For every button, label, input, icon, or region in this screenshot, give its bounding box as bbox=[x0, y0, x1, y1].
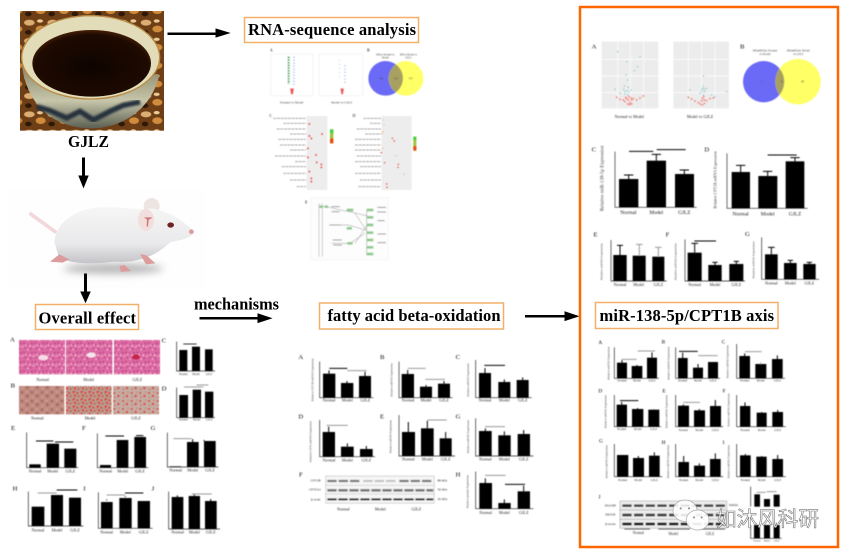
bar chart C: C bbox=[722, 339, 726, 345]
micrographs: liver histology H&E: GJLZ bbox=[132, 377, 143, 382]
photo: white mouse bbox=[7, 188, 205, 288]
bar chart I: Normal bbox=[741, 478, 750, 482]
heading: miR-138-5p/CPT1B axis bbox=[596, 302, 778, 328]
arrow: mechanisms bbox=[200, 314, 271, 322]
bar chart A bbox=[598, 340, 659, 383]
bar chart I bbox=[83, 486, 153, 535]
venn diagram B: 5 bbox=[761, 80, 763, 84]
bar chart F: Model bbox=[117, 468, 129, 473]
bar chart D bbox=[598, 389, 661, 431]
venn diagram B: DEmiRNAs Model bbox=[787, 49, 810, 53]
bar chart H: GJLZ bbox=[519, 510, 529, 515]
western blot F: CPT1B bbox=[311, 479, 321, 483]
bar chart D: Model bbox=[193, 418, 201, 422]
bar chart E: E bbox=[662, 389, 666, 395]
bar chart G bbox=[745, 231, 819, 285]
bar chart C: Model bbox=[757, 379, 765, 383]
micrographs: liver Oil Red O staining: Normal bbox=[31, 415, 45, 420]
bar chart I: GJLZ bbox=[139, 530, 149, 535]
bar chart C: Model bbox=[499, 398, 511, 403]
small bar charts beside blot J: Normal bbox=[753, 540, 761, 543]
bar chart C bbox=[456, 354, 532, 403]
arrow: fatty acid oxidation to miR axis bbox=[526, 312, 578, 320]
bar chart A: Relative CPT1B mRNA Expression bbox=[311, 358, 315, 401]
micrographs: liver Oil Red O staining: GJLZ bbox=[131, 415, 141, 420]
bar chart D: Normal bbox=[617, 427, 626, 431]
panel: miR-138-5p/CPT1B axis frame bbox=[580, 7, 838, 547]
micrographs: liver Oil Red O staining: Model bbox=[85, 415, 96, 420]
bar chart E: Normal bbox=[402, 457, 416, 462]
bar chart A bbox=[298, 354, 373, 403]
watermark: WeChat icon bbox=[673, 500, 709, 530]
bar chart G: Relative mRNA Expression bbox=[605, 445, 609, 478]
venn diagram: DEGs Model vs bbox=[400, 54, 417, 57]
bar chart B: Normal bbox=[402, 398, 415, 403]
bar chart H: Relative protein Expression bbox=[465, 475, 469, 508]
venn diagram B: 6 bbox=[781, 80, 783, 84]
bar chart G bbox=[151, 425, 218, 473]
bar chart B: Model bbox=[421, 398, 432, 403]
venn diagram: 757 bbox=[408, 76, 413, 80]
KEGG bubble chart D: D bbox=[353, 113, 356, 118]
bar chart D: GJLZ bbox=[206, 418, 213, 422]
heading: fatty acid beta-oxidation: fatty acid beta-oxidation bbox=[328, 306, 500, 325]
bar chart E: Model bbox=[633, 282, 645, 287]
bar chart D bbox=[162, 385, 215, 422]
bar chart G: Relative mRNA Expression bbox=[751, 241, 755, 278]
bar chart G: Normal bbox=[169, 468, 183, 473]
bar chart E: GJLZ bbox=[712, 428, 719, 432]
bar chart H: GJLZ bbox=[712, 478, 719, 482]
volcano plot Normal vs Model: A bbox=[592, 43, 597, 50]
bar chart C: Relative mRNA Expression bbox=[725, 345, 729, 378]
venn diagram: 764 bbox=[379, 76, 384, 80]
bar chart E bbox=[380, 413, 455, 462]
KEGG bubble chart D bbox=[353, 113, 416, 190]
arrow: mouse to overall effect bbox=[81, 274, 90, 302]
bar chart H: Normal bbox=[32, 528, 45, 533]
bar chart C: Normal bbox=[179, 372, 188, 376]
bar chart C: Model bbox=[649, 210, 664, 216]
bar chart B: Model bbox=[694, 379, 702, 383]
bar chart E: Relative mRNA Expression bbox=[665, 395, 669, 428]
panel: miRNA sequencing and qPCR figures bbox=[592, 42, 821, 287]
bar chart E bbox=[11, 425, 78, 473]
western blot F: 50 kDa bbox=[437, 488, 448, 492]
bar chart E: Relative mRNA Expression bbox=[389, 420, 393, 453]
bar chart E bbox=[593, 232, 667, 287]
bar chart G: Model bbox=[785, 280, 797, 285]
venn diagram: Model bbox=[382, 56, 389, 59]
venn diagram bbox=[367, 48, 423, 96]
bar chart I: Relative mRNA Expression bbox=[727, 445, 731, 478]
arrow: tea to RNA sequencing bbox=[168, 29, 229, 37]
bar chart F bbox=[723, 389, 786, 432]
bar chart H: Normal bbox=[679, 478, 688, 482]
bar chart D bbox=[704, 147, 808, 217]
bar chart D: D bbox=[162, 386, 167, 393]
bar chart H: H bbox=[456, 472, 461, 479]
heading: fatty acid beta-oxidation bbox=[320, 303, 504, 329]
photo: bowl of GJLZ tea bbox=[20, 11, 164, 131]
venn diagram B: B bbox=[740, 43, 745, 50]
bar chart J: Model bbox=[189, 530, 201, 535]
KEGG bubble chart C: C bbox=[269, 113, 272, 118]
pathway diagram: E bbox=[305, 199, 308, 204]
bar chart J: J bbox=[152, 486, 155, 493]
bar chart C: C bbox=[592, 147, 597, 154]
bar chart E: E bbox=[593, 232, 597, 239]
bar chart C: GJLZ bbox=[774, 379, 781, 383]
bar chart D: Normal bbox=[179, 418, 188, 422]
panel: overall effect figures bbox=[10, 337, 220, 535]
bar chart G: Relative mRNA Expression bbox=[466, 420, 470, 453]
bar chart H: Relative mRNA Expression bbox=[666, 445, 670, 478]
bar chart E: E bbox=[380, 413, 384, 420]
bar chart D: Model bbox=[761, 211, 775, 217]
bar chart I bbox=[723, 440, 786, 482]
bar chart E: Normal bbox=[29, 468, 42, 473]
bar chart H bbox=[662, 440, 723, 482]
western blot F: 42 kDa bbox=[437, 497, 448, 501]
pathway diagram bbox=[305, 198, 388, 260]
bar chart G: G bbox=[599, 439, 603, 445]
bar chart C bbox=[592, 145, 697, 216]
bar chart A: A bbox=[598, 340, 602, 346]
bar chart C: GJLZ bbox=[518, 398, 528, 403]
bar chart H: H bbox=[13, 486, 18, 493]
bar chart H: Model bbox=[499, 510, 511, 515]
bar chart F: GJLZ bbox=[774, 428, 781, 432]
bar chart H: H bbox=[662, 440, 666, 446]
heading: Overall effect: Overall effect bbox=[38, 308, 136, 328]
bar chart A: A bbox=[298, 354, 303, 361]
bar chart G bbox=[456, 413, 533, 462]
heading: RNA-sequence analysis: RNA-sequence analysis bbox=[248, 20, 417, 39]
bar chart H: Model bbox=[52, 528, 63, 533]
western blot J: GJLZ bbox=[706, 532, 715, 536]
bar chart C: Normal bbox=[620, 210, 637, 216]
panel: RNA-sequence figures bbox=[269, 48, 423, 260]
bar chart C: GJLZ bbox=[678, 210, 691, 216]
bar chart A: Normal bbox=[617, 379, 627, 383]
bar chart G bbox=[599, 439, 662, 482]
bar chart G: G bbox=[745, 231, 750, 238]
western blot F: 88 kDa bbox=[437, 479, 448, 483]
bar chart F: F bbox=[82, 425, 86, 432]
bar chart G: GJLZ bbox=[205, 468, 215, 473]
bar chart D: Relative CPT1B mRNA Expression bbox=[713, 151, 718, 209]
bar chart G: GJLZ bbox=[804, 280, 815, 285]
bar chart A: Relative mRNA Expression bbox=[606, 346, 610, 380]
bar chart D: GJLZ bbox=[650, 427, 657, 431]
bar chart B: Normal bbox=[678, 379, 687, 383]
bar chart D: D bbox=[598, 389, 602, 395]
western blot J: Normal bbox=[633, 531, 644, 535]
bar chart H: Normal bbox=[479, 510, 493, 515]
bar chart C: Relative miR-138-5p Expression bbox=[600, 145, 605, 211]
bar chart H bbox=[456, 472, 533, 515]
bar chart E: Model bbox=[422, 457, 434, 462]
bar chart H bbox=[13, 486, 83, 533]
western blot F: F bbox=[299, 472, 303, 479]
small bar charts beside blot J bbox=[751, 487, 782, 543]
bar chart G: Model bbox=[634, 478, 642, 482]
bar chart B bbox=[380, 354, 453, 403]
small bar charts beside blot J: GJLZ bbox=[774, 540, 780, 543]
bar chart F: GJLZ bbox=[135, 468, 145, 473]
bar chart C bbox=[722, 339, 785, 383]
volcano plots bbox=[270, 49, 363, 104]
bar chart B: GJLZ bbox=[439, 398, 449, 403]
venn diagram B: vs GJLZ bbox=[793, 52, 804, 56]
bar chart B: Relative mRNA Expression bbox=[667, 346, 671, 380]
bar chart D: Normal bbox=[323, 457, 336, 462]
bar chart C: Model bbox=[192, 372, 200, 376]
bar chart B: B bbox=[662, 339, 666, 345]
bar chart A: Model bbox=[633, 379, 641, 383]
KEGG bubble chart C bbox=[269, 113, 333, 190]
bar chart E: GJLZ bbox=[441, 457, 451, 462]
bar chart B: Relative mRNA Expression bbox=[389, 363, 393, 397]
bar chart H: Model bbox=[695, 478, 703, 482]
bar chart F: Relative mRNA Expression bbox=[674, 243, 678, 280]
venn diagram: B bbox=[367, 48, 370, 53]
bar chart A: Model bbox=[342, 398, 354, 403]
venn diagram B: 68 bbox=[801, 80, 805, 84]
bar chart B: GJLZ bbox=[710, 379, 717, 383]
bar chart D: Relative CPT2 mRNA Expression bbox=[309, 421, 313, 462]
bar chart C: C bbox=[162, 337, 167, 344]
western blot J: Model bbox=[669, 532, 678, 536]
bar chart F: Normal bbox=[688, 282, 702, 287]
venn diagram: 357 bbox=[394, 76, 399, 80]
western blot J: J bbox=[598, 494, 600, 500]
bar chart J bbox=[152, 486, 220, 535]
bar chart D: Model bbox=[342, 457, 354, 462]
western blot J bbox=[598, 494, 739, 536]
volcano plot Model vs GJLZ bbox=[673, 42, 729, 119]
micrographs: liver Oil Red O staining: B bbox=[11, 383, 16, 390]
bar chart E: Relative mRNA Expression bbox=[600, 243, 604, 280]
bar chart A: GJLZ bbox=[360, 398, 371, 403]
bar chart G: G bbox=[456, 413, 461, 420]
micrographs: liver histology H&E: Model bbox=[83, 377, 95, 382]
micrographs: liver histology H&E: A bbox=[10, 337, 15, 344]
bar chart I: I bbox=[723, 440, 725, 446]
western blot J: DICER bbox=[605, 513, 616, 517]
bar chart C bbox=[162, 337, 215, 376]
western blot F: CPT2A1 bbox=[309, 488, 321, 492]
western blot F: Normal bbox=[337, 507, 351, 512]
volcano plots: Normal vs Model bbox=[280, 100, 303, 104]
bar chart C: Relative mRNA Expression bbox=[466, 363, 470, 397]
bar chart G: Normal bbox=[618, 478, 627, 482]
bar chart G: G bbox=[151, 425, 156, 432]
bar chart E: Normal bbox=[614, 282, 627, 287]
venn diagram B: vs Model bbox=[759, 52, 771, 56]
western blot F: Model bbox=[375, 507, 387, 512]
venn diagram: DEGs Normal vs bbox=[376, 54, 394, 57]
bar chart I: Model bbox=[758, 478, 766, 482]
volcano plots: Model vs GJLZ bbox=[331, 100, 352, 104]
bar chart G: Model bbox=[499, 457, 511, 462]
bar chart G: Normal bbox=[765, 280, 779, 285]
venn diagram B bbox=[740, 43, 821, 104]
bar chart I: Normal bbox=[100, 530, 114, 535]
volcano plots: A bbox=[270, 49, 273, 53]
bar chart F: GJLZ bbox=[731, 282, 742, 287]
bar chart G: Normal bbox=[479, 457, 493, 462]
bar chart D: Normal bbox=[733, 211, 749, 217]
micrographs: liver histology H&E: Normal bbox=[36, 377, 50, 382]
bar chart D: GJLZ bbox=[789, 211, 801, 217]
bar chart D bbox=[298, 413, 375, 462]
bar chart I: I bbox=[83, 486, 86, 493]
bar chart I: Model bbox=[120, 530, 132, 535]
bar chart E: Model bbox=[695, 428, 703, 432]
bar chart F bbox=[82, 425, 148, 473]
bar chart D: D bbox=[298, 413, 303, 420]
heading: miR-138-5p/CPT1B axis: miR-138-5p/CPT1B axis bbox=[600, 306, 775, 325]
bar chart G: GJLZ bbox=[651, 478, 658, 482]
volcano plot Normal vs Model: Normal vs Model bbox=[615, 114, 645, 119]
bar chart D: Model bbox=[634, 427, 642, 431]
bar chart A: Normal bbox=[323, 398, 336, 403]
small bar charts beside blot J: Model bbox=[764, 540, 770, 543]
watermark: account name: 如沐风科研 bbox=[716, 508, 819, 531]
label: GJLZ: GJLZ bbox=[68, 132, 109, 151]
volcano plot Normal vs Model bbox=[592, 42, 658, 119]
bar chart J: Normal bbox=[171, 530, 185, 535]
bar chart F: Model bbox=[758, 428, 766, 432]
arrow: tea to mouse bbox=[79, 158, 88, 187]
bar chart A: GJLZ bbox=[649, 379, 656, 383]
bar chart E: Normal bbox=[679, 428, 688, 432]
western blot J: β-Actin bbox=[605, 522, 616, 526]
western blot F: GJLZ bbox=[411, 507, 422, 512]
micrographs: liver histology H&E bbox=[10, 337, 160, 382]
bar chart J: GJLZ bbox=[206, 530, 216, 535]
panel: miR-138-5p/CPT1B figures bbox=[598, 339, 786, 543]
bar chart E: E bbox=[11, 425, 15, 432]
venn diagram: GJLZ bbox=[405, 56, 412, 59]
bar chart G: Model bbox=[187, 468, 199, 473]
bar chart F bbox=[666, 232, 745, 287]
western blot J: 160kDa bbox=[729, 503, 739, 507]
bar chart B bbox=[662, 339, 720, 383]
western blot F: β-actin bbox=[311, 498, 321, 502]
bar chart E: Model bbox=[47, 468, 59, 473]
western blot F bbox=[299, 472, 448, 512]
bar chart E: GJLZ bbox=[653, 282, 664, 287]
venn diagram B: DEmiRNAs Normal bbox=[753, 49, 777, 53]
bar chart D: GJLZ bbox=[361, 457, 372, 462]
bar chart E: GJLZ bbox=[65, 468, 76, 473]
bar chart F: F bbox=[723, 389, 726, 395]
western blot J: DGCR8 bbox=[605, 504, 616, 508]
bar chart C: C bbox=[456, 354, 461, 361]
bar chart G: GJLZ bbox=[519, 457, 529, 462]
bar chart I: GJLZ bbox=[774, 478, 781, 482]
bar chart C: GJLZ bbox=[206, 372, 213, 376]
bar chart C: Normal bbox=[479, 398, 492, 403]
bar chart F: Normal bbox=[99, 468, 113, 473]
micrographs: liver Oil Red O staining bbox=[11, 383, 159, 420]
bar chart C: Normal bbox=[740, 379, 749, 383]
label: mechanisms: mechanisms bbox=[194, 294, 280, 314]
bar chart H: GJLZ bbox=[70, 528, 80, 533]
volcano plot Model vs GJLZ: Model vs GJLZ bbox=[687, 114, 714, 119]
bar chart F: Relative mRNA Expression bbox=[726, 393, 730, 427]
bar chart F: Normal bbox=[740, 428, 750, 432]
bar chart D: Relative mRNA Expression bbox=[604, 395, 608, 428]
bar chart B: B bbox=[380, 354, 385, 361]
bar chart F: F bbox=[666, 232, 670, 239]
bar chart F: Model bbox=[710, 282, 721, 287]
bar chart D: D bbox=[704, 147, 709, 154]
panel: fatty acid beta-oxidation figures bbox=[298, 354, 533, 515]
bar chart E bbox=[662, 389, 723, 432]
